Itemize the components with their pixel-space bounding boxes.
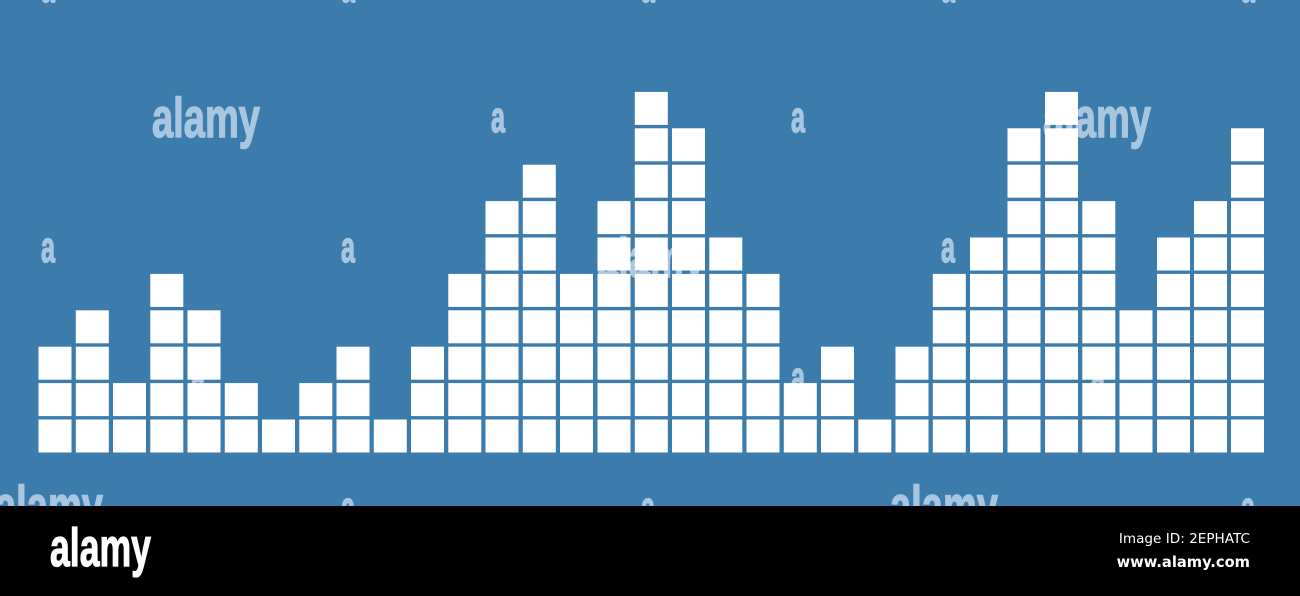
watermarks: alamy <box>1043 86 1151 149</box>
watermarks: a <box>41 223 55 272</box>
watermarks: a <box>1241 483 1255 532</box>
image id: Image ID: 2EPHATC <box>1119 531 1250 547</box>
watermarks: a <box>491 93 505 142</box>
equalizer bar chart <box>38 92 1264 453</box>
watermarks: a <box>791 353 805 402</box>
watermarks: alamy <box>152 86 260 149</box>
watermarks: alamy <box>597 226 705 289</box>
watermarks: a <box>1091 353 1105 402</box>
watermarks: a <box>791 93 805 142</box>
website: www.alamy.com <box>1117 554 1250 571</box>
watermarks: a <box>941 223 955 272</box>
watermarks: a <box>341 223 355 272</box>
black footer band <box>0 506 1300 596</box>
footer logo: alamy <box>50 518 151 578</box>
watermarks: a <box>641 483 655 532</box>
watermarks: a <box>341 483 355 532</box>
watermarks: a <box>191 353 205 402</box>
watermarks: alamy <box>890 474 998 537</box>
